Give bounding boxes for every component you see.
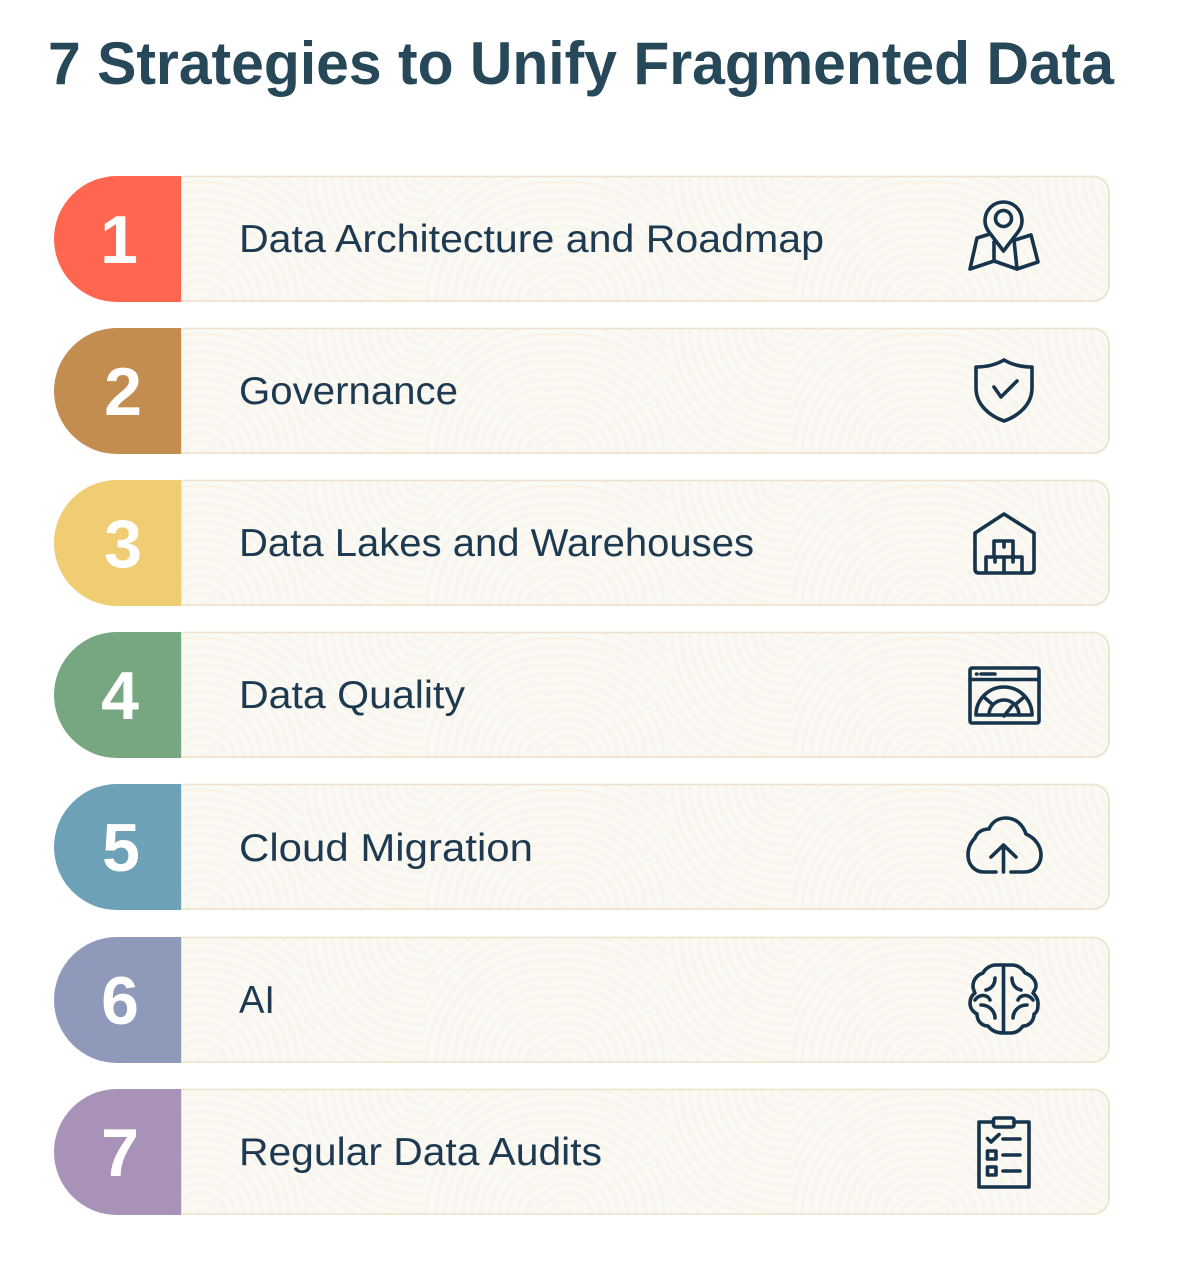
row 2: Governance: 2: [104, 354, 142, 430]
icon: browser gauge: [970, 668, 1039, 723]
row 2: Governance: Governance: [239, 370, 458, 413]
row 7: Regular Data Audits: [54, 1089, 1109, 1215]
row 1: Data Architecture and Roadmap: Data Architecture and Roadmap: [239, 218, 824, 261]
row 5: Cloud Migration: Cloud Migration: [239, 827, 533, 870]
row 3: Data Lakes and Warehouses: [54, 480, 1109, 606]
row 3: Data Lakes and Warehouses: Data Lakes and Warehouses: [239, 522, 754, 565]
icon: warehouse with boxes: [975, 514, 1034, 573]
row 6: AI: AI: [239, 979, 275, 1022]
icon: cloud upload: [968, 818, 1041, 872]
icon: clipboard checklist: [979, 1118, 1029, 1187]
row 2: Governance: [54, 328, 1109, 454]
row 6: AI: 6: [101, 963, 139, 1039]
row 4: Data Quality: Data Quality: [239, 674, 466, 717]
icon: map pin: [970, 202, 1038, 269]
row 7: Regular Data Audits: Regular Data Audits: [239, 1131, 602, 1174]
row 1: Data Architecture and Roadmap: 1: [100, 202, 138, 278]
row 7: Regular Data Audits: 7: [101, 1115, 139, 1191]
title: 7 Strategies to Unify Fragmented Data: [48, 30, 1115, 97]
row 3: Data Lakes and Warehouses: 3: [104, 506, 142, 582]
row 5: Cloud Migration: 5: [102, 810, 140, 886]
row 4: Data Quality: [54, 632, 1109, 758]
row 1: Data Architecture and Roadmap: [54, 176, 1109, 302]
row 4: Data Quality: 4: [101, 658, 139, 734]
icon: shield with check: [976, 360, 1032, 421]
row 5: Cloud Migration: [54, 784, 1109, 910]
row 6: AI: [54, 937, 1109, 1063]
icon: brain: [970, 965, 1038, 1033]
